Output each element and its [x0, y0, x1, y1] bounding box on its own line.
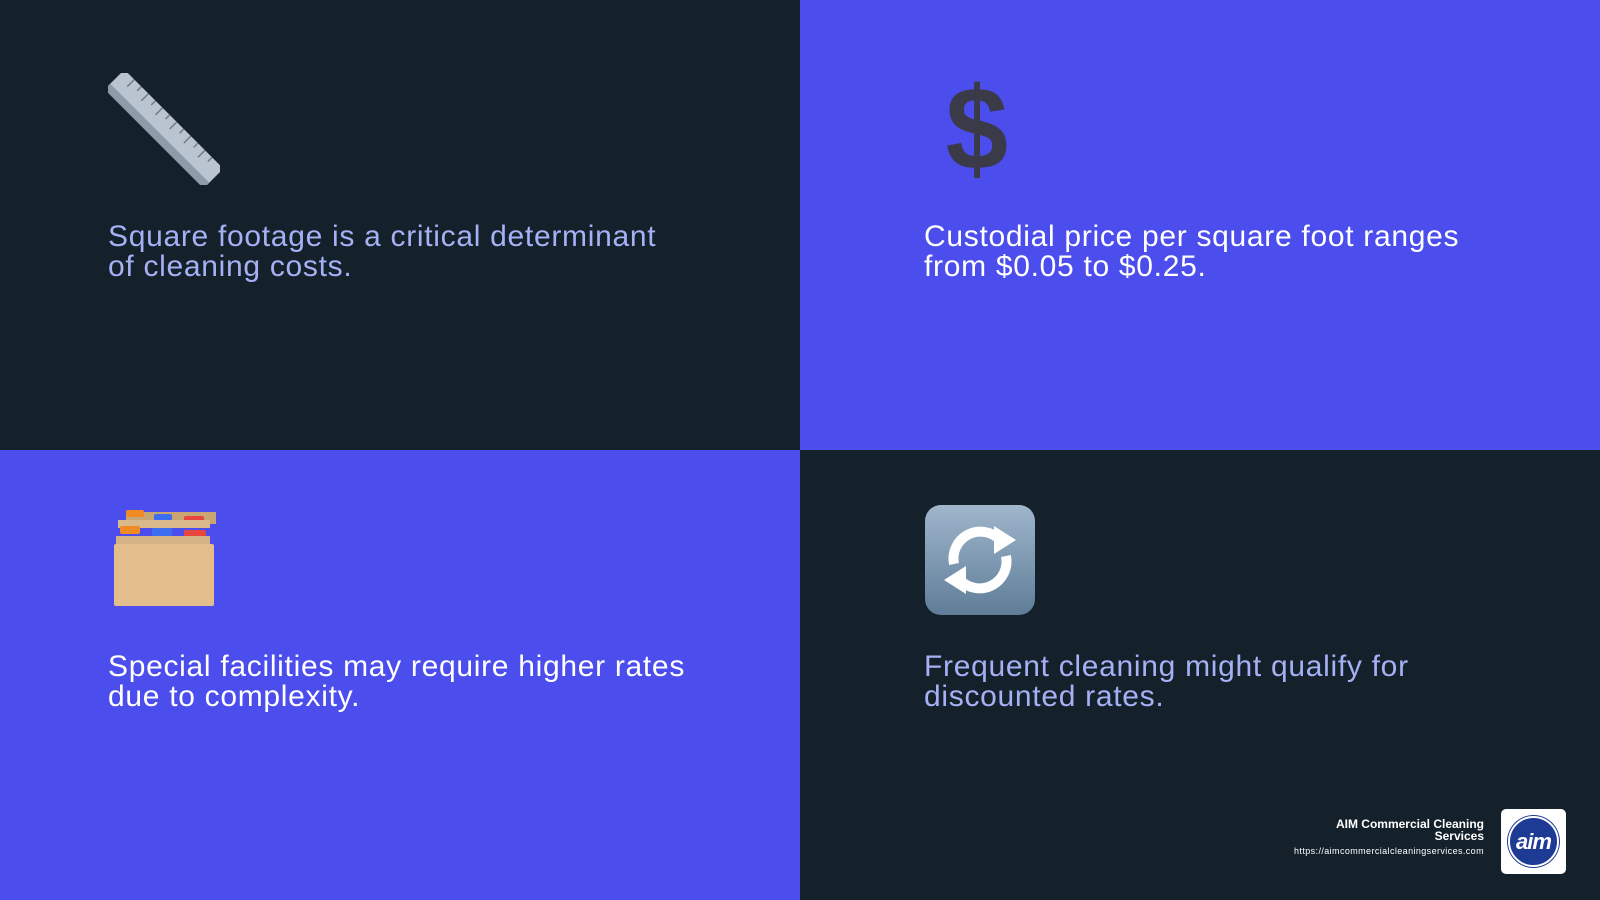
text: special facilities	[108, 650, 685, 713]
text: frequent cleaning	[924, 650, 1409, 713]
text: special facilities: due to complexity.	[108, 680, 360, 713]
icon: refresh	[925, 505, 1035, 615]
panel: square footage	[0, 0, 800, 450]
icon: card file box	[114, 510, 216, 606]
brand text	[1294, 817, 1484, 856]
logo: aim	[1516, 829, 1551, 854]
brand footer	[1294, 809, 1566, 874]
panel: special facilities	[0, 450, 800, 900]
logo	[1501, 809, 1566, 874]
brand text: https://aimcommercialcleaningservices.com	[1294, 846, 1484, 856]
panel: price per square foot	[800, 0, 1600, 450]
text: square footage	[108, 220, 656, 283]
text: special facilities: Special facilities may require higher rates	[108, 650, 685, 683]
text: frequent cleaning: Frequent cleaning might qualify for	[924, 650, 1409, 683]
brand text: AIM Commercial Cleaning	[1336, 817, 1484, 831]
text: square footage: of cleaning costs.	[108, 250, 352, 283]
icon: ruler	[108, 73, 220, 185]
text: frequent cleaning: discounted rates.	[924, 680, 1164, 713]
text: price range: from $0.05 to $0.25.	[924, 250, 1207, 283]
icon: dollar: $	[946, 63, 1008, 195]
text: price range: Custodial price per square foot ranges	[924, 220, 1459, 253]
brand text: Services	[1435, 829, 1484, 843]
text: square footage: Square footage is a critical determinant	[108, 220, 656, 253]
panel: frequent cleaning	[800, 450, 1600, 900]
text: price range	[924, 220, 1459, 283]
